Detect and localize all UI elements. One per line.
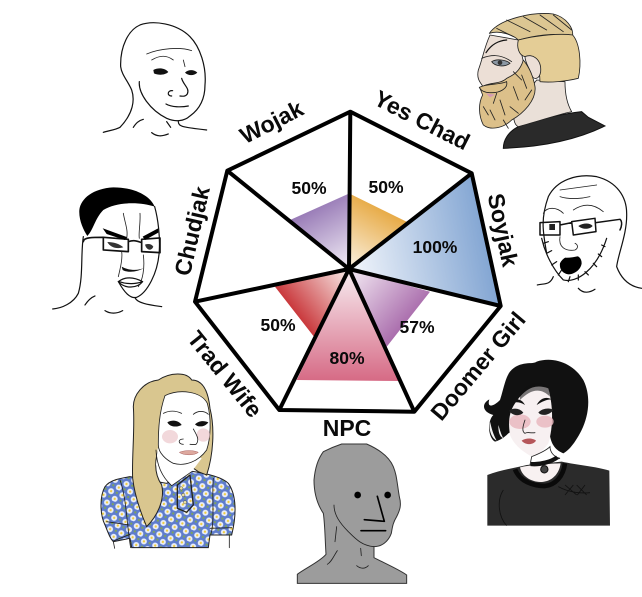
- radar chart: [195, 112, 501, 412]
- label: Wojak: Wojak: [236, 95, 308, 149]
- percentage: Wojak: 50%: [291, 178, 327, 198]
- segment: Wojak 50%: [290, 194, 349, 269]
- percentage: Yes Chad: 50%: [368, 177, 404, 197]
- icon: Doomer Girl portrait: [484, 360, 610, 526]
- segment: NPC 80%: [297, 269, 399, 381]
- label: Chudjak: Chudjak: [169, 184, 215, 278]
- segment: Yes Chad 50%: [349, 194, 407, 269]
- percentage: Doomer Girl: 57%: [399, 317, 435, 337]
- icon: NPC head: [297, 444, 407, 583]
- percentage: Trad Wife: 50%: [260, 315, 296, 335]
- icon: Yes Chad face: [478, 14, 605, 148]
- segment: Trad Wife 50%: [275, 269, 349, 337]
- segment: Soyjak 100%: [349, 173, 501, 306]
- label: Doomer Girl: Doomer Girl: [425, 307, 531, 425]
- icon: Trad Wife portrait: [101, 374, 235, 548]
- percentage: NPC: 80%: [329, 348, 365, 368]
- percentage: Soyjak: 100%: [413, 237, 458, 257]
- icon: Soyjak face: [537, 176, 642, 292]
- label: NPC: NPC: [323, 415, 371, 441]
- heptagon outline: [195, 112, 501, 412]
- segment: Doomer Girl 57%: [349, 269, 430, 347]
- label: Soyjak: Soyjak: [483, 191, 523, 269]
- icon: Chudjak face: [53, 187, 162, 313]
- label: Yes Chad: Yes Chad: [370, 85, 474, 155]
- label: Trad Wife: Trad Wife: [182, 326, 268, 422]
- heptagon spokes: [195, 112, 501, 412]
- icon: Wojak face: [103, 23, 207, 136]
